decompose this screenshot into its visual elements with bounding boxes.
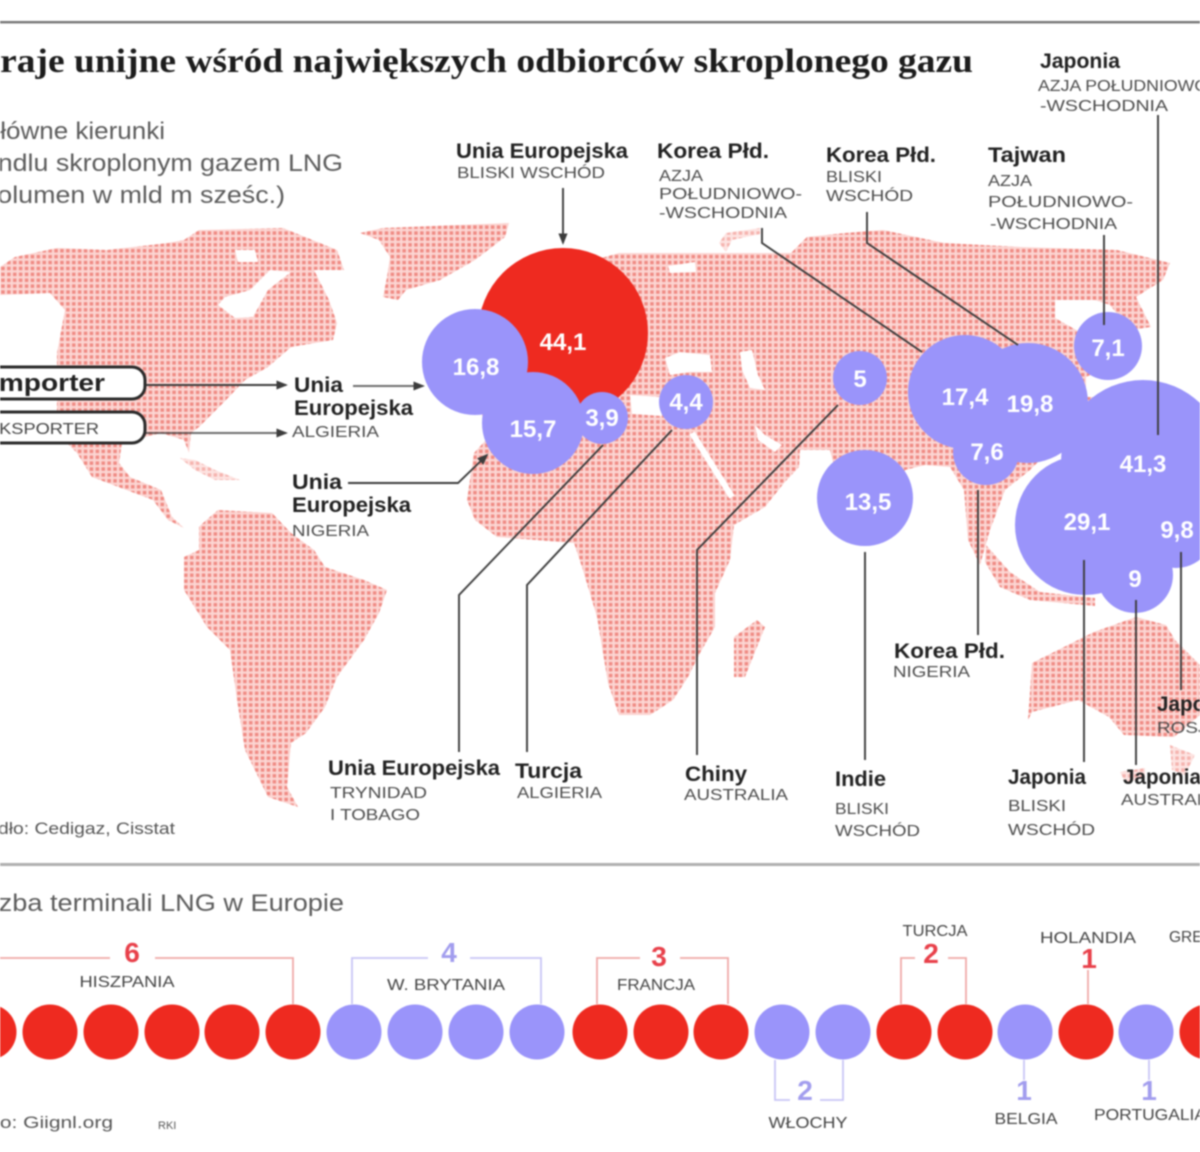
bracket: Holandia 1 [1040, 930, 1137, 1004]
label: Japonia - Azja Południowo-Wschodnia [1038, 50, 1200, 115]
label: Tajwan - Azja Południowo-Wschodnia: POŁUDNIOWO- [988, 194, 1133, 211]
label: UE - Bliski Wschód: Unia Europejska [456, 140, 628, 163]
bubble group: Europe and Mediterranean importers: 3,9 [585, 405, 619, 432]
bracket: Holandia 1: HOLANDIA [1040, 930, 1137, 947]
label: Chiny - Australia: Chiny [685, 763, 747, 786]
bracket: Hiszpania 6 [0, 937, 293, 1004]
bubble group: Asia importers: 41,3 [1120, 451, 1166, 478]
bubble group: Asia importers: 29,1 [1064, 509, 1110, 536]
label: Japonia - Australia: Japonia [1123, 766, 1200, 789]
bubble group: Europe and Mediterranean importers: 15,7 [510, 416, 556, 443]
bracket: Włochy 2 [768, 1060, 848, 1132]
label: Japonia - Australia [1121, 766, 1200, 809]
bracket: Portugalia 1: PORTUGALIA [1094, 1107, 1200, 1124]
label: Korea Płd. - Azja Południowo-Wschodnia: AZJA [659, 168, 704, 185]
label: Japonia - Bliski Wschód: BLISKI [1008, 798, 1066, 815]
terminal dots row [0, 1004, 1200, 1060]
bubble: Unia Europejska from Middle East 44,1 [478, 248, 648, 418]
bracket: Turcja 2: 2 [923, 938, 939, 969]
bracket: Francja 3: 3 [651, 941, 667, 972]
label: Korea Płd. - Bliski Wschód: WSCHÓD [826, 188, 913, 205]
credit: RKI [158, 1120, 176, 1132]
label: Japonia - Azja Południowo-Wschodnia: -WSCHODNIA [1040, 98, 1169, 115]
label: Korea Płd. - Nigeria: NIGERIA [893, 664, 971, 681]
bubble group: Asia importers: 9 [1128, 566, 1142, 593]
label: Korea Płd. - Azja Południowo-Wschodnia: POŁUDNIOWO- [659, 186, 802, 203]
label: UE - Algieria [292, 374, 413, 441]
label: UE - Algieria: ALGIERIA [292, 424, 380, 441]
label: UE - Trynidad i Tobago: Unia Europejska [328, 757, 500, 780]
label: Japonia - Bliski Wschód: Japonia [1008, 766, 1086, 789]
bracket: Turcja 2: TURCJA [902, 923, 968, 940]
label: Korea Płd. - Azja Południowo-Wschodnia: Korea Płd. [657, 140, 769, 163]
bracket: Belgia 1 [994, 1060, 1058, 1128]
label: Korea Płd. - Nigeria [893, 640, 1005, 681]
label: Turcja - Algieria: ALGIERIA [517, 785, 603, 802]
label: UE - Trynidad i Tobago: I TOBAGO [330, 807, 420, 824]
label: UE - Bliski Wschód: BLISKI WSCHÓD [457, 165, 605, 182]
bracket: Francja 3: FRANCJA [617, 977, 696, 994]
label: Korea Płd. - Bliski Wschód: Korea Płd. [826, 144, 936, 167]
label: Tajwan - Azja Południowo-Wschodnia: AZJA [988, 173, 1033, 190]
label: UE - Nigeria [292, 471, 411, 540]
bubble group: Asia importers: 5 [853, 366, 867, 393]
bracket: Hiszpania 6: 6 [124, 937, 140, 968]
label: Korea Płd. - Azja Południowo-Wschodnia [657, 140, 802, 222]
label: UE - Nigeria: Unia [292, 471, 342, 494]
label: UE - Trynidad i Tobago: TRYNIDAD [330, 785, 427, 802]
label: Tajwan - Azja Południowo-Wschodnia [988, 144, 1133, 233]
bubble: Unia Europejska from Middle East 44,1: 44,1 [540, 329, 586, 356]
bracket: Wielka Brytania 4 [352, 937, 541, 1004]
label: UE - Nigeria: Europejska [292, 494, 411, 517]
bracket: Holandia 1: 1 [1081, 943, 1097, 974]
leader lines [348, 115, 1181, 765]
label: Indie - Bliski Wschód: Indie [835, 768, 886, 791]
bracket: Wielka Brytania 4: W. BRYTANIA [387, 977, 506, 994]
bracket: Belgia 1: 1 [1016, 1075, 1032, 1106]
label: UE - Bliski Wschód [456, 140, 628, 182]
label: Korea Płd. - Bliski Wschód [826, 144, 936, 205]
label: Chiny - Australia [684, 763, 789, 804]
label: Indie - Bliski Wschód [835, 768, 920, 840]
bracket: Francja 3 [597, 941, 728, 1004]
label: Japonia - Rosja [1157, 693, 1200, 737]
dotted world map [0, 223, 1200, 807]
label: Indie - Bliski Wschód: BLISKI [835, 801, 889, 818]
subtitle: main LNG trade directions [0, 118, 343, 209]
label: Korea Płd. - Nigeria: Korea Płd. [894, 640, 1005, 663]
label: Chiny - Australia: AUSTRALIA [684, 787, 789, 804]
bracket: Wielka Brytania 4: 4 [441, 937, 457, 968]
label: Korea Płd. - Azja Południowo-Wschodnia: -WSCHODNIA [659, 205, 788, 222]
label: Japonia - Azja Południowo-Wschodnia: AZJA POŁUDNIOWO- [1038, 78, 1200, 95]
label: Japonia - Bliski Wschód: WSCHÓD [1008, 822, 1095, 839]
bubble group: Asia importers: 7,6 [970, 439, 1004, 466]
label: UE - Nigeria: NIGERIA [292, 523, 370, 540]
bubble group: Asia importers: 17,4 [942, 384, 989, 411]
label: Korea Płd. - Bliski Wschód: BLISKI [826, 169, 882, 186]
label: Tajwan - Azja Południowo-Wschodnia: -WSCHODNIA [990, 216, 1118, 233]
label: UE - Algieria: Europejska [294, 397, 413, 420]
legend: importer and exporter pills [0, 367, 286, 443]
bracket: Portugalia 1: 1 [1141, 1075, 1157, 1106]
bubble group: Asia importers: 9,8 [1160, 517, 1194, 544]
bracket: Włochy 2: 2 [797, 1075, 813, 1106]
bubble group: Asia importers: 13,5 [845, 489, 891, 516]
bubble group: Asia importers [817, 312, 1200, 613]
label: Tajwan - Azja Południowo-Wschodnia: Tajwan [988, 144, 1066, 167]
bubble group: Europe and Mediterranean importers: 16,8 [453, 354, 499, 381]
label: UE - Algieria: Unia [294, 374, 343, 397]
bracket: Belgia 1: BELGIA [994, 1111, 1058, 1128]
bracket: Turcja 2 [901, 923, 968, 1004]
bubble group: Asia importers: 7,1 [1091, 335, 1125, 362]
label: Indie - Bliski Wschód: WSCHÓD [835, 823, 920, 840]
bubble group: Asia importers: 19,8 [1007, 391, 1053, 418]
bubble group: Europe and Mediterranean importers: 4,4 [669, 389, 703, 416]
label: Turcja - Algieria [515, 760, 603, 802]
bracket: Portugalia 1 [1094, 1060, 1200, 1124]
bracket: Włochy 2: WŁOCHY [768, 1115, 848, 1132]
label: UE - Trynidad i Tobago [328, 757, 500, 824]
bubble group: Europe and Mediterranean importers [422, 309, 713, 474]
label: Turcja - Algieria: Turcja [515, 760, 582, 783]
label: Japonia - Bliski Wschód [1008, 766, 1095, 839]
bracket: Hiszpania 6: HISZPANIA [80, 974, 175, 991]
label: Japonia - Azja Południowo-Wschodnia: Japonia [1040, 50, 1120, 73]
